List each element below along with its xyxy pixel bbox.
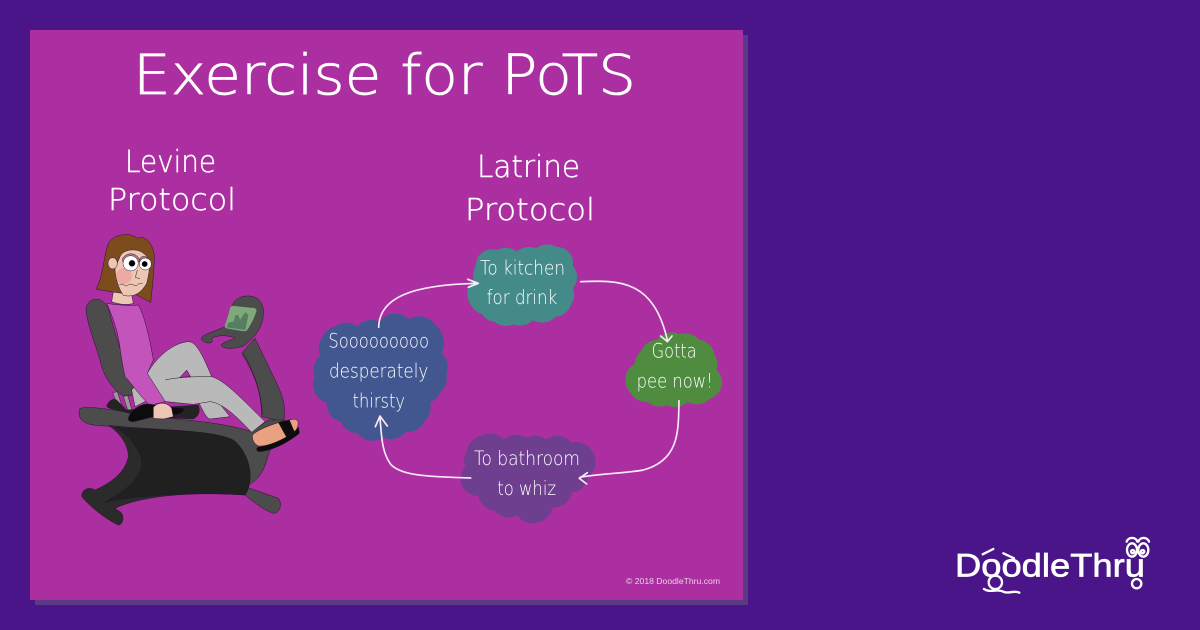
heading: Levine Protocol: Levine	[125, 145, 216, 180]
gap under knee	[180, 370, 191, 377]
logo face doodle	[983, 538, 1149, 593]
seat posts	[113, 392, 132, 412]
near leg	[132, 342, 265, 432]
face	[115, 250, 149, 296]
bubble: Gotta pee now!	[625, 332, 722, 407]
bubble: To bathroom to whiz: To bathroom	[474, 447, 580, 470]
handlebar grip	[128, 404, 184, 422]
arrow: pee to bathroom	[579, 401, 679, 484]
heading: Levine Protocol: Protocol	[108, 183, 236, 218]
logo: DoodleThru: DoodleThru	[955, 547, 1145, 584]
bubble: Sooooooooo desperately thirsty: thirsty	[353, 390, 405, 413]
foot	[252, 419, 298, 446]
nose and mouth	[119, 270, 143, 286]
heading: Latrine Protocol: Protocol	[465, 193, 595, 228]
far leg	[198, 400, 230, 419]
bubble: Gotta pee now!: pee now!	[637, 369, 713, 392]
hair	[96, 235, 154, 302]
sandal strap	[278, 420, 295, 437]
backrest	[86, 299, 135, 396]
knee fold	[165, 377, 212, 380]
heading: Latrine Protocol	[465, 150, 595, 228]
arrow: bathroom to thirsty	[375, 416, 471, 478]
bubble: Gotta pee now!: Gotta	[652, 339, 697, 362]
ear	[108, 258, 117, 269]
console	[201, 296, 263, 348]
sandal sole	[257, 427, 299, 452]
hand	[153, 403, 173, 419]
arrow: thirsty to kitchen	[379, 279, 478, 327]
panel shadow	[35, 35, 748, 605]
heading: Latrine Protocol: Latrine	[477, 150, 580, 185]
bubble: To kitchen for drink: for drink	[487, 286, 557, 309]
seat cushion	[107, 399, 199, 419]
illustration: woman on recumbent exercise bike	[79, 235, 299, 525]
bubble: To bathroom to whiz	[461, 434, 595, 523]
arrow: kitchen to pee	[581, 281, 672, 342]
bike frame	[79, 408, 284, 513]
bubble: To bathroom to whiz: to whiz	[497, 477, 556, 500]
bubble: Sooooooooo desperately thirsty: desperately	[329, 360, 428, 383]
copyright: © 2018 DoodleThru.com	[626, 576, 720, 586]
console screen	[225, 306, 256, 331]
bike body inner shadow	[105, 427, 250, 502]
blush	[116, 268, 132, 284]
bubble: Sooooooooo desperately thirsty: Sooooooooo	[328, 330, 429, 353]
neck	[112, 292, 133, 304]
bubble: Sooooooooo desperately thirsty	[313, 313, 448, 441]
logo: DoodleThru	[955, 538, 1149, 593]
title: Exercise for PoTS	[133, 43, 636, 107]
bike console post	[242, 338, 285, 422]
eyes	[123, 254, 151, 271]
screen bars	[227, 312, 248, 330]
bike dark body	[82, 425, 250, 525]
bubble: To kitchen for drink	[467, 244, 577, 326]
cycle diagram	[313, 244, 722, 523]
console post inner line	[243, 353, 262, 415]
bubble: To kitchen for drink: To kitchen	[480, 256, 565, 279]
heading: Levine Protocol	[108, 145, 236, 218]
panel: main comic	[30, 30, 743, 600]
sweater	[107, 303, 165, 405]
